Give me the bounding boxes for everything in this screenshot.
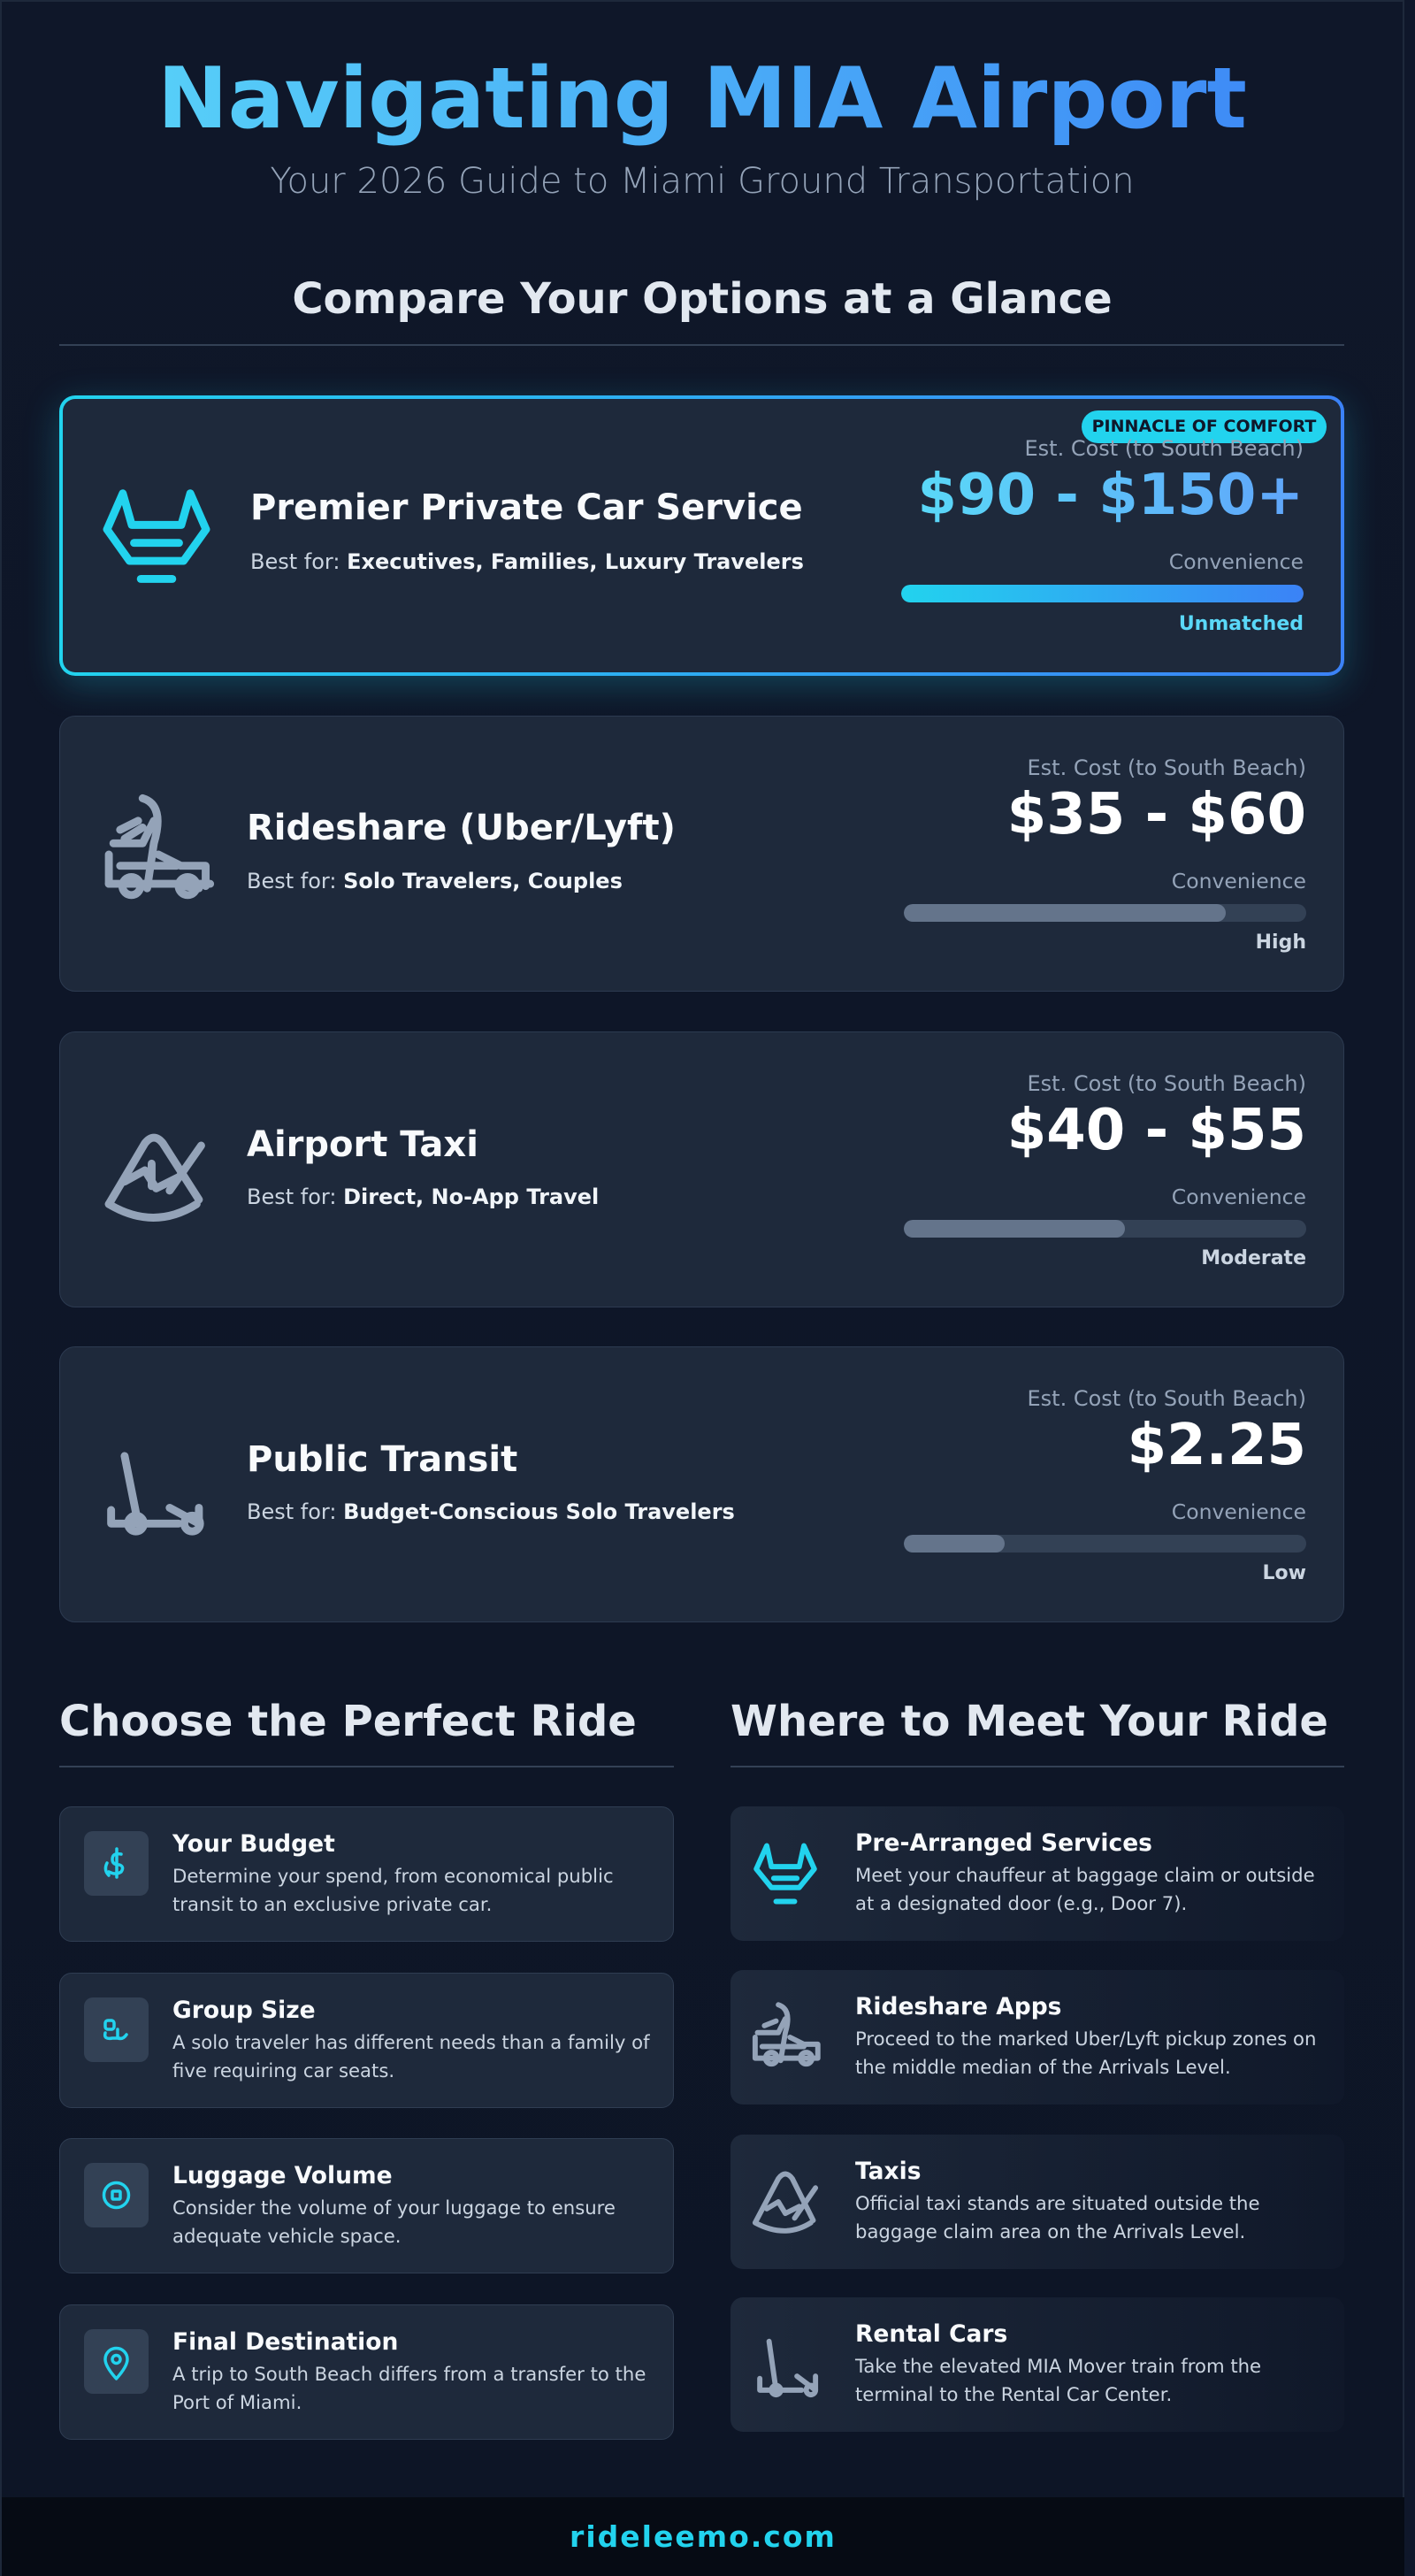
icon: private car xyxy=(103,489,210,583)
card: rideshare: $35 - $60 xyxy=(1007,782,1306,847)
heading: compare: Compare Your Options at a Glance xyxy=(292,274,1113,324)
panel: taxis: Official taxi stands are situated outside the baggage claim area on the Arrivals Level. xyxy=(855,2192,1260,2242)
card title: Rideshare (Uber/Lyft) xyxy=(247,808,676,848)
icon: luggage xyxy=(84,2163,149,2227)
card: rideshare: High xyxy=(1256,932,1306,954)
card title: Airport Taxi xyxy=(247,1124,478,1165)
card: public transit xyxy=(59,1346,1344,1622)
icon: taxi xyxy=(752,2171,819,2234)
panel: rental cars xyxy=(730,2297,1344,2432)
panel: luggage: Luggage Volume xyxy=(172,2162,393,2189)
convenience bar xyxy=(904,904,1306,922)
subtitle: Your 2026 Guide to Miami Ground Transportation xyxy=(270,161,1135,202)
icon: car xyxy=(753,1844,817,1904)
panel: rideshare apps: Proceed to the marked Uber/Lyft pickup zones on the middle median of the Arrivals Level. xyxy=(855,2028,1316,2078)
card: rideshare: Convenience xyxy=(1172,869,1306,893)
card: rideshare xyxy=(59,716,1344,992)
card: premier private car: Convenience xyxy=(1169,549,1304,574)
panel: rideshare apps xyxy=(730,1970,1344,2104)
best for: Best for: Solo Travelers, Couples xyxy=(247,869,623,893)
convenience bar xyxy=(904,1535,1306,1552)
panel: group size xyxy=(59,1973,674,2108)
panel: taxis: Taxis xyxy=(855,2158,922,2185)
card: rideshare: Est. Cost (to South Beach) xyxy=(1028,755,1306,780)
card title: Public Transit xyxy=(247,1439,517,1480)
panel: rideshare apps: Rideshare Apps xyxy=(855,1993,1061,2020)
panel: pre-arranged: Meet your chauffeur at baggage claim or outside at a designated door (e.g., Door 7). xyxy=(855,1864,1315,1914)
heading: choose: Choose the Perfect Ride xyxy=(59,1697,637,1746)
heading: where to meet: Where to Meet Your Ride xyxy=(730,1697,1328,1746)
card: public transit: Est. Cost (to South Beach) xyxy=(1028,1386,1306,1411)
card: public transit: Convenience xyxy=(1172,1499,1306,1524)
convenience bar xyxy=(901,585,1304,602)
icon: pin xyxy=(84,2329,149,2394)
cost: Est. Cost (to South Beach) xyxy=(1024,436,1304,461)
panel: your budget: Determine your spend, from economical public transit to an exclusive private car. xyxy=(172,1865,614,1915)
icon: group xyxy=(84,1997,149,2062)
card: premier private car: $90 - $150+ xyxy=(918,463,1304,528)
card: premier private car xyxy=(59,395,1344,676)
panel: pre-arranged: Pre-Arranged Services xyxy=(855,1829,1152,1857)
card title: Premier Private Car Service xyxy=(250,487,803,528)
panel: luggage: Consider the volume of your luggage to ensure adequate vehicle space. xyxy=(172,2196,616,2247)
icon: transit xyxy=(107,1453,204,1536)
footer xyxy=(2,2497,1404,2576)
card: public transit: $2.25 xyxy=(1128,1413,1306,1478)
card: taxi xyxy=(59,1031,1344,1307)
best for: Best for: Budget-Conscious Solo Travelers xyxy=(247,1499,735,1524)
card: premier private car: Unmatched xyxy=(1179,613,1304,635)
panel: final destination xyxy=(59,2304,674,2440)
title: Navigating MIA Airport xyxy=(157,50,1247,148)
icon: budget xyxy=(84,1831,149,1896)
panel: group size: A solo traveler has different needs than a family of five requiring car seats. xyxy=(172,2031,650,2082)
card: taxi: Convenience xyxy=(1172,1184,1306,1209)
badge xyxy=(1082,410,1327,443)
panel: your budget: Your Budget xyxy=(172,1830,335,1858)
panel: group size: Group Size xyxy=(172,1997,316,2024)
card: taxi: Est. Cost (to South Beach) xyxy=(1028,1071,1306,1096)
best for: Best for: Direct, No-App Travel xyxy=(247,1184,599,1209)
panel: rental cars: Take the elevated MIA Mover train from the terminal to the Rental Car Center. xyxy=(855,2355,1261,2405)
card: public transit: Low xyxy=(1263,1562,1306,1584)
best for: Best for: Executives, Families, Luxury Travelers xyxy=(250,549,804,574)
footer: rideleemo.com xyxy=(570,2519,837,2554)
panel: taxis xyxy=(730,2135,1344,2269)
icon: rental xyxy=(757,2339,819,2397)
panel: final destination: A trip to South Beach differs from a transfer to the Port of Miami. xyxy=(172,2363,646,2413)
card: taxi: Moderate xyxy=(1201,1247,1306,1269)
icon: rideshare xyxy=(104,794,214,899)
panel: pre-arranged xyxy=(730,1806,1344,1941)
convenience bar xyxy=(904,1220,1306,1238)
icon: rideshare xyxy=(752,2002,821,2066)
panel: luggage xyxy=(59,2138,674,2273)
panel: final destination: Final Destination xyxy=(172,2328,398,2356)
panel: rental cars: Rental Cars xyxy=(855,2320,1007,2348)
panel: your budget xyxy=(59,1806,674,1942)
icon: taxi xyxy=(104,1134,205,1222)
badge: PINNACLE OF COMFORT xyxy=(1092,417,1316,436)
card: taxi: $40 - $55 xyxy=(1007,1098,1306,1163)
